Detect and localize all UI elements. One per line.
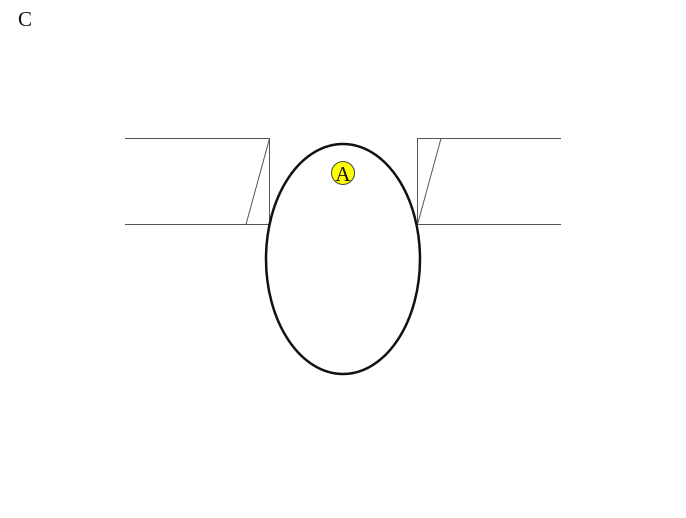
left rectangle structure — [125, 138, 270, 224]
marker A — [332, 162, 354, 186]
right rectangle structure — [418, 138, 561, 224]
label C: C — [18, 7, 32, 31]
marker A: A — [335, 162, 351, 186]
oval — [266, 144, 420, 374]
